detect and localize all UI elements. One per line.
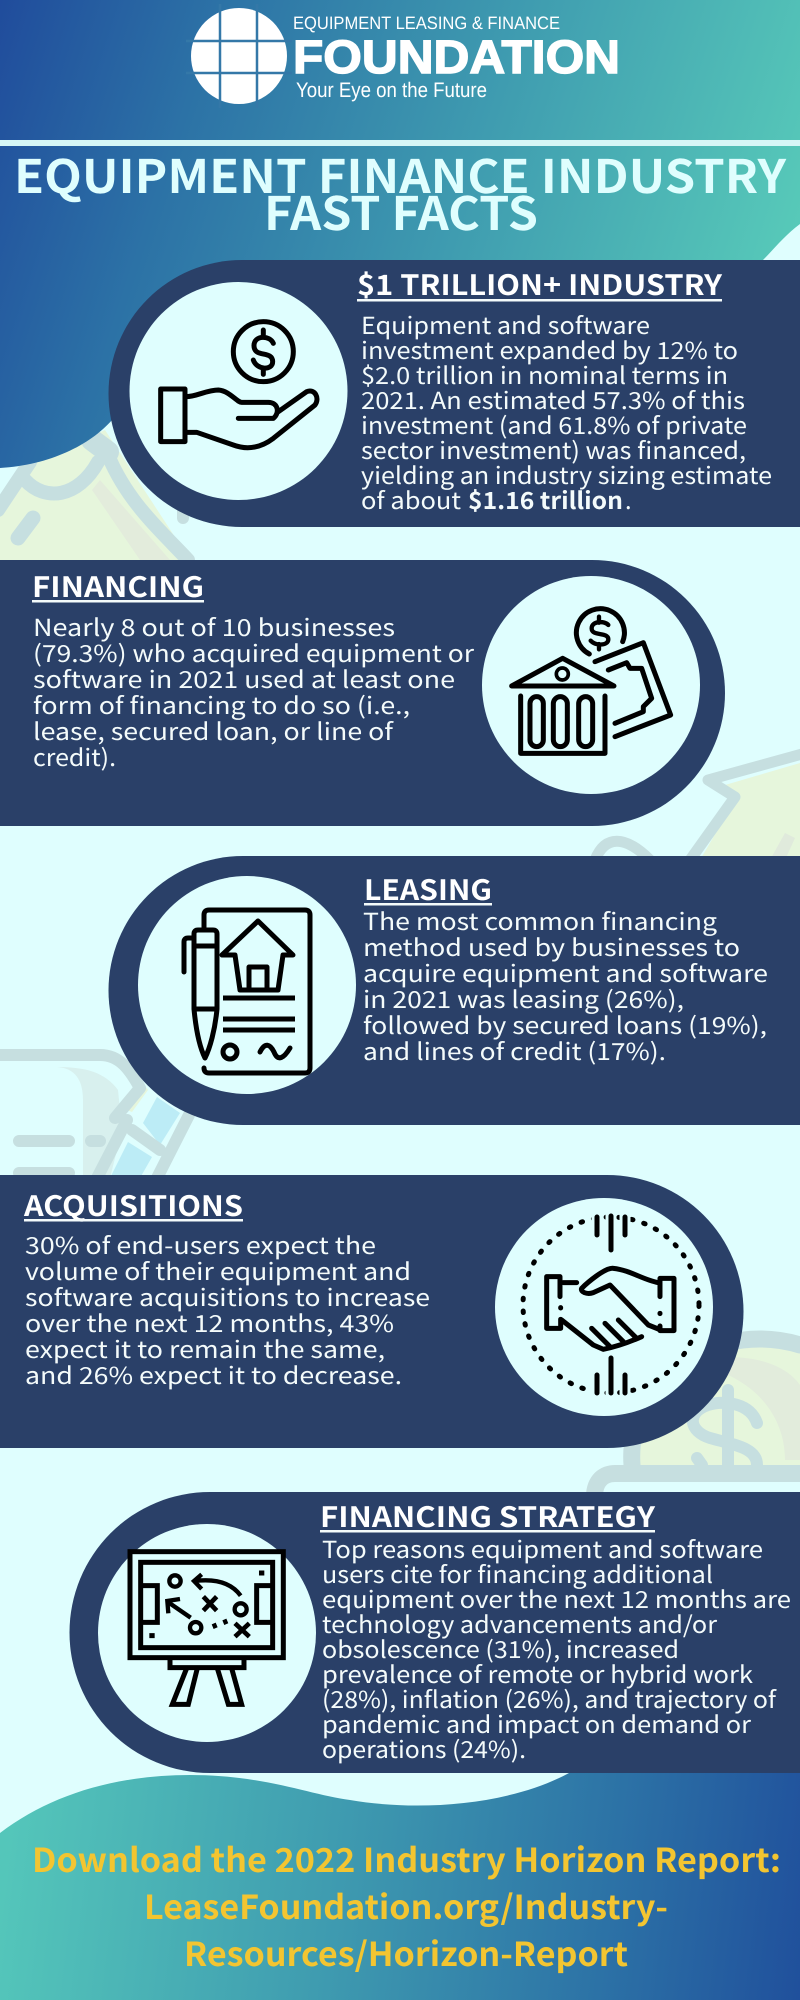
- body text: operations (24%).: [322, 1731, 526, 1765]
- background illustration: arrow: [595, 754, 800, 860]
- icon: strategy board: [130, 1552, 283, 1704]
- heading: LEASING: [364, 869, 492, 909]
- body text: acquire equipment and software: [363, 955, 768, 989]
- icon: handshake: [523, 1210, 699, 1398]
- top gradient wave: [0, 0, 800, 468]
- body text: over the next 12 months, 43%: [25, 1305, 394, 1339]
- body text: $1.16 trillion: [468, 482, 623, 516]
- body text: expect it to remain the same,: [25, 1331, 385, 1365]
- call to action: download report: Resources/Horizon-Report: [184, 1928, 628, 1976]
- body text: (79.3%) who acquired equipment or: [33, 635, 475, 669]
- body text: pandemic and impact on demand or: [322, 1706, 752, 1740]
- heading: $1 TRILLION+ INDUSTRY: [357, 264, 723, 304]
- bottom gradient wave: [0, 1760, 800, 2000]
- body text: software in 2021 used at least one: [33, 661, 455, 695]
- title: [14, 141, 786, 244]
- body text: Top reasons equipment and software: [322, 1531, 763, 1565]
- icon circle: [130, 282, 348, 500]
- heading: FINANCING: [32, 566, 204, 606]
- body text: of about: [361, 482, 461, 516]
- body text: $2.0 trillion in nominal terms in: [361, 357, 728, 391]
- dotted ring: [523, 1210, 699, 1398]
- body text: .: [625, 482, 632, 516]
- icon: hand holding coin: [161, 322, 317, 448]
- body text: [322, 1531, 791, 1765]
- clasped hands: [547, 1268, 674, 1349]
- icon: contract with house and pen: [184, 910, 310, 1073]
- body text: investment expanded by 12% to: [361, 332, 738, 366]
- body text: 2021. An estimated 57.3% of this: [361, 382, 745, 416]
- body text: obsolescence (31%), increased: [322, 1631, 679, 1665]
- body text: users cite for financing additional: [322, 1556, 713, 1590]
- logo: Equipment Leasing & Finance Foundation: FOUNDATION: [293, 30, 620, 83]
- call to action: download report: Download the 2022 Industry Horizon Report:: [32, 1834, 781, 1882]
- logo: Equipment Leasing & Finance Foundation: EQUIPMENT LEASING & FINANCE: [293, 13, 560, 33]
- icon circle: [495, 1198, 713, 1416]
- background illustration: dollar dome: [586, 1339, 800, 1497]
- background illustration: document and ruler: [0, 1055, 190, 1178]
- body text: investment (and 61.8% of private: [361, 407, 747, 441]
- body text: Equipment and software: [361, 307, 650, 341]
- body text: credit).: [33, 739, 116, 773]
- icon circle: [482, 576, 700, 794]
- panel: acquisitions: [0, 1175, 744, 1448]
- body text: 30% of end-users expect the: [25, 1227, 376, 1261]
- body text: sector investment) was financed,: [361, 432, 746, 466]
- body text: volume of their equipment and: [25, 1253, 411, 1287]
- background illustration: money bill: [0, 430, 190, 560]
- body text: (28%), inflation (26%), and trajectory of: [322, 1681, 777, 1715]
- body text: [363, 903, 768, 1067]
- body text: equipment over the next 12 months are: [322, 1581, 791, 1615]
- body text: The most common financing: [363, 903, 717, 937]
- logo: Equipment Leasing & Finance Foundation: [186, 4, 620, 108]
- body text: in 2021 was leasing (26%),: [363, 981, 684, 1015]
- divider line: [0, 140, 800, 146]
- body text: [361, 307, 772, 516]
- icon circle: [98, 1524, 316, 1742]
- panel: leasing: [108, 856, 800, 1125]
- body text: form of financing to do so (i.e.,: [33, 687, 410, 721]
- icon circle: [138, 876, 356, 1094]
- panel: $1 trillion+ industry: [109, 260, 800, 527]
- logo globe: [186, 4, 292, 108]
- body text: [33, 609, 475, 773]
- call to action: download report: LeaseFoundation.org/Industry-: [144, 1881, 668, 1929]
- body text: technology advancements and/or: [322, 1606, 718, 1640]
- body text: Nearly 8 out of 10 businesses: [33, 609, 395, 643]
- logo: Equipment Leasing & Finance Foundation: Your Eye on the Future: [296, 79, 487, 102]
- body text: [25, 1227, 430, 1391]
- call to action: download report: [32, 1834, 781, 1976]
- icon: bank and money: [512, 609, 671, 753]
- heading: ACQUISITIONS: [23, 1185, 243, 1225]
- title: EQUIPMENT FINANCE INDUSTRY: [14, 141, 786, 207]
- panel: financing strategy: [70, 1492, 800, 1773]
- title: FAST FACTS: [264, 178, 538, 244]
- body text: and lines of credit (17%).: [363, 1033, 666, 1067]
- body text: followed by secured loans (19%),: [363, 1007, 767, 1041]
- body text: software acquisitions to increase: [25, 1279, 430, 1313]
- body text: lease, secured loan, or line of: [33, 713, 395, 747]
- body text: and 26% expect it to decrease.: [25, 1357, 402, 1391]
- heading: FINANCING STRATEGY: [320, 1496, 656, 1536]
- panel: financing: [0, 560, 725, 826]
- body text: prevalence of remote or hybrid work: [322, 1656, 753, 1690]
- body text: method used by businesses to: [363, 929, 740, 963]
- body text: yielding an industry sizing estimate: [361, 457, 772, 491]
